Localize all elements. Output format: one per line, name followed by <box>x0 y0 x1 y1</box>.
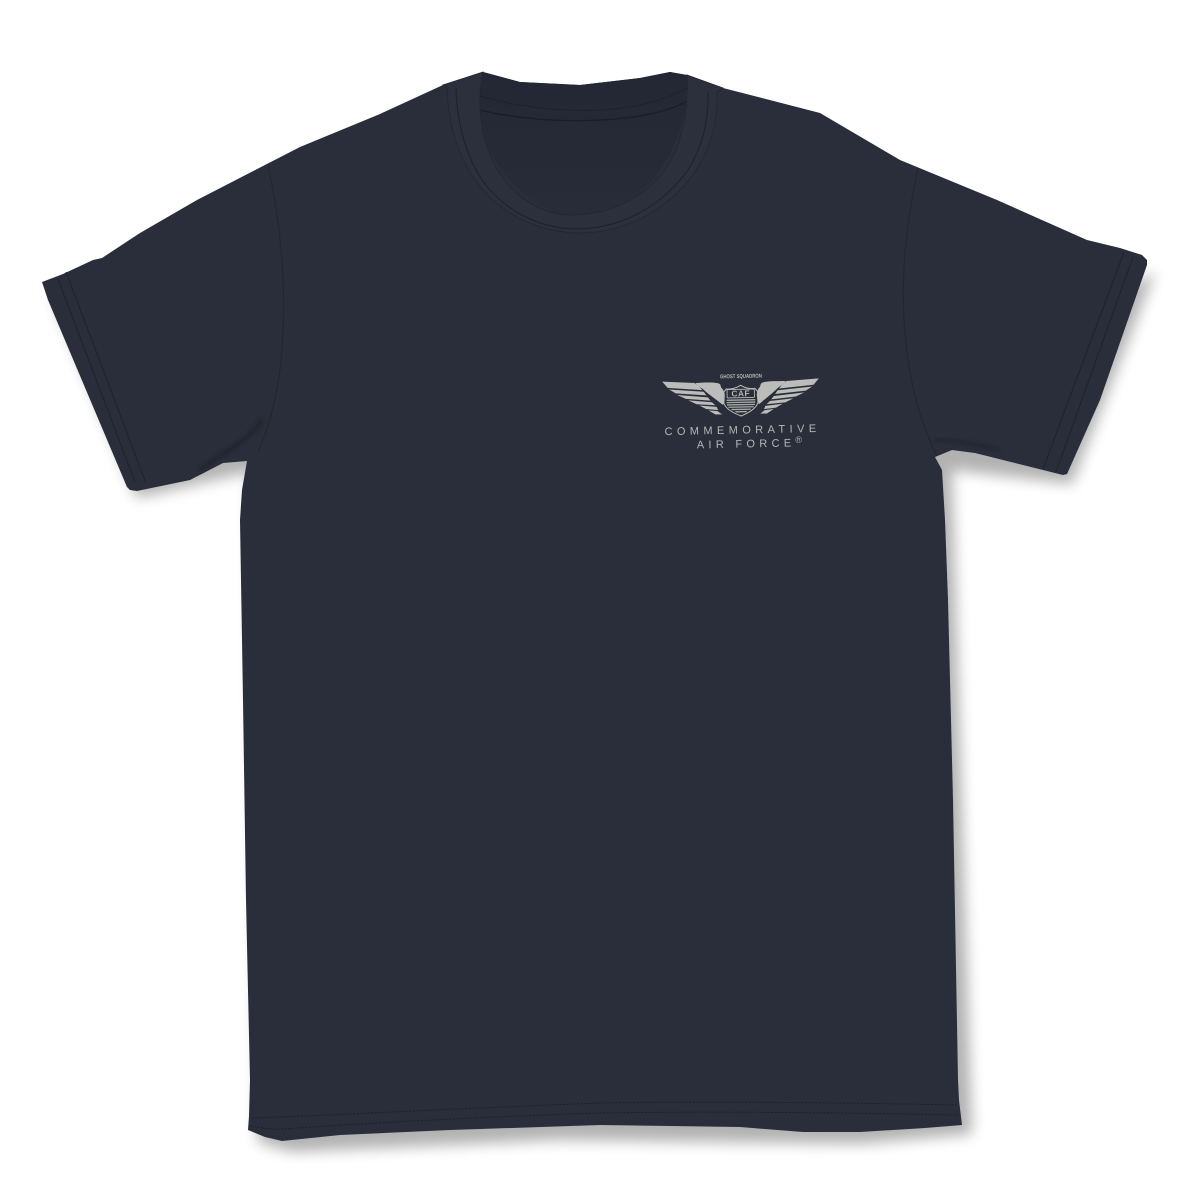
collar stitching <box>456 88 708 229</box>
bottom hem stitching <box>250 1102 958 1129</box>
inside back of neck <box>478 72 687 215</box>
collar ribbing <box>443 72 723 233</box>
underarm fold shadow <box>200 420 262 470</box>
left wing <box>662 380 726 416</box>
shield badge: CAF <box>731 388 750 399</box>
shield badge <box>724 385 758 416</box>
wings emblem <box>662 378 820 418</box>
back neck tape stitching <box>480 88 687 121</box>
logo wordmark line 1: COMMEMORATIVE <box>664 423 821 438</box>
right wing <box>755 378 819 414</box>
armhole seams <box>258 165 937 456</box>
logo caption: Ghost Squadron: GHOST SQUADRON <box>720 374 762 380</box>
chest logo: Commemorative Air Force <box>662 372 821 452</box>
sleeve hem stitching <box>58 252 1133 483</box>
logo wordmark line 2: ® <box>795 435 802 445</box>
garment drop shadow <box>52 272 1155 1152</box>
logo wordmark line 2: AIR FORCE <box>697 437 796 451</box>
